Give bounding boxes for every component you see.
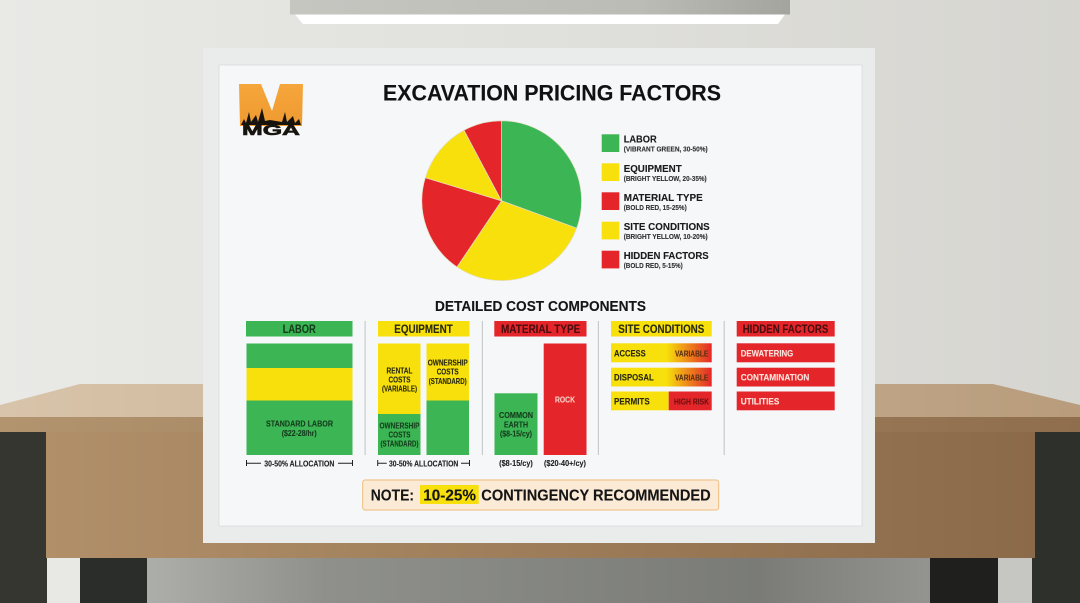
legend item: site conditions: (BRIGHT YELLOW, 10-20%) xyxy=(624,234,708,241)
access row xyxy=(611,343,712,362)
material type header: MATERIAL TYPE xyxy=(501,324,581,336)
disposal row: DISPOSAL xyxy=(614,373,654,384)
equipment left bar: RENTAL xyxy=(386,365,412,375)
material type header xyxy=(494,321,586,336)
equipment right bar xyxy=(426,344,469,455)
legend item: material type: MATERIAL TYPE xyxy=(624,192,703,204)
dewatering row: DEWATERING xyxy=(741,349,793,360)
logo: MGA xyxy=(242,123,301,139)
rock bar xyxy=(544,344,586,455)
access row: ACCESS xyxy=(614,349,646,360)
callout: contingency note: 10-25% xyxy=(423,488,476,505)
labor header: LABOR xyxy=(283,324,316,336)
poster outer frame xyxy=(203,48,875,543)
material price labels xyxy=(499,458,586,468)
panel: labor xyxy=(246,321,352,469)
legend item: labor: LABOR xyxy=(624,134,657,146)
panel: hidden factors xyxy=(737,321,835,410)
site conditions header: SITE CONDITIONS xyxy=(618,324,705,336)
common earth bar: EARTH xyxy=(504,420,528,430)
disposal row xyxy=(611,368,712,386)
labor stacked bar xyxy=(246,344,352,455)
logo xyxy=(239,84,303,139)
material price labels: ($20-40+/cy) xyxy=(544,458,586,468)
legend xyxy=(602,134,710,270)
equipment left bar: (VARIABLE) xyxy=(382,384,417,394)
equipment header xyxy=(378,321,470,336)
panel: site conditions xyxy=(611,321,712,410)
equipment allocation bracket: 30-50% ALLOCATION xyxy=(389,459,458,469)
equipment left bar xyxy=(378,344,420,455)
legend item: hidden factors: (BOLD RED, 5-15%) xyxy=(624,263,683,270)
pie chart xyxy=(422,121,582,281)
legend item: material type: (BOLD RED, 15-25%) xyxy=(624,205,687,212)
hidden factors header: HIDDEN FACTORS xyxy=(743,324,829,336)
permits row: PERMITS xyxy=(614,397,650,408)
title: EXCAVATION PRICING FACTORS xyxy=(383,81,721,106)
equipment left bar: COSTS xyxy=(388,430,411,440)
ceiling light fixture xyxy=(290,0,790,24)
common earth bar: COMMON xyxy=(499,410,533,420)
floor-level wall below the desk xyxy=(0,558,1080,603)
labor stacked bar: ($22-28/hr) xyxy=(282,429,317,438)
section heading: DETAILED COST COMPONENTS xyxy=(435,299,646,315)
legend item: material type xyxy=(602,192,703,212)
poster panel xyxy=(219,65,862,526)
equipment left bar: (STANDARD) xyxy=(380,438,419,448)
legend item: site conditions xyxy=(602,221,710,241)
labor header xyxy=(246,321,352,336)
utilities row: UTILITIES xyxy=(741,397,779,408)
equipment left bar: COSTS xyxy=(388,374,411,384)
material price labels: ($8-15/cy) xyxy=(499,458,533,468)
panel: material type xyxy=(494,321,586,468)
legend item: equipment xyxy=(602,163,707,183)
contamination row: CONTAMINATION xyxy=(741,373,809,384)
legend item: site conditions: SITE CONDITIONS xyxy=(624,221,710,233)
legend item: hidden factors: HIDDEN FACTORS xyxy=(624,250,709,262)
disposal row: VARIABLE xyxy=(675,373,709,383)
legend item: labor xyxy=(602,134,708,154)
legend item: equipment: (BRIGHT YELLOW, 20-35%) xyxy=(624,176,707,183)
legend item: hidden factors xyxy=(602,250,709,270)
equipment right bar: (STANDARD) xyxy=(429,376,467,386)
panel: equipment xyxy=(378,321,470,469)
common earth bar: ($8-15/cy) xyxy=(500,430,532,438)
labor stacked bar: STANDARD LABOR xyxy=(266,419,333,429)
callout: contingency note: NOTE: xyxy=(371,488,414,505)
legend item: labor: (VIBRANT GREEN, 30-50%) xyxy=(624,147,708,154)
equipment header: EQUIPMENT xyxy=(394,324,453,336)
common earth bar xyxy=(494,393,538,455)
desk xyxy=(0,384,1080,603)
legend item: equipment: EQUIPMENT xyxy=(624,163,682,175)
equipment left bar: OWNERSHIP xyxy=(380,420,420,430)
permits row: HIGH RISK xyxy=(674,396,710,406)
access row: VARIABLE xyxy=(675,349,709,359)
callout: contingency note: CONTINGENCY RECOMMENDED xyxy=(481,488,711,505)
equipment right bar: OWNERSHIP xyxy=(428,358,468,368)
callout: contingency note xyxy=(363,480,719,510)
permits row xyxy=(611,392,712,410)
labor allocation bracket: 30-50% ALLOCATION xyxy=(264,459,334,469)
rock bar: ROCK xyxy=(555,394,576,404)
equipment right bar: COSTS xyxy=(437,367,459,377)
